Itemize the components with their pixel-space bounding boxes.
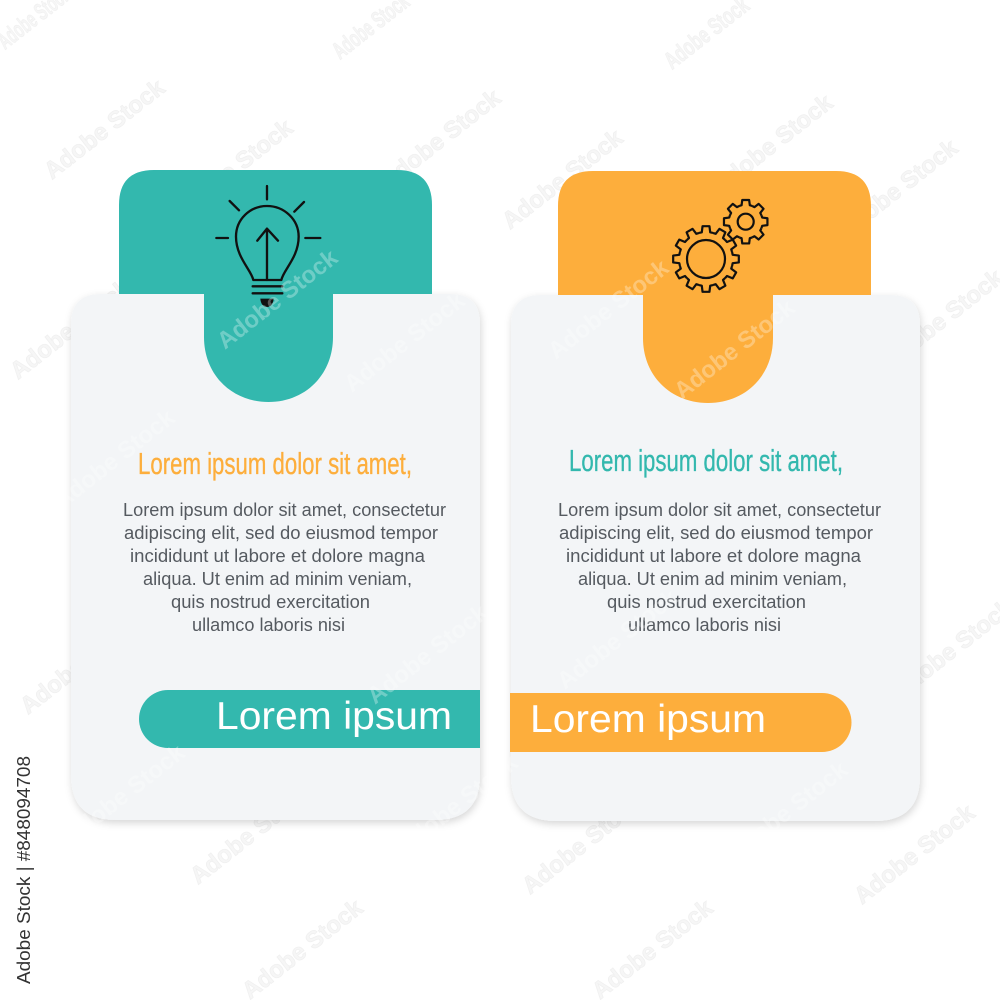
left body text: quis nostrud exercitation (171, 592, 370, 612)
text: Adobe Stock (517, 789, 648, 900)
right body text: aliqua. Ut enim ad minim veniam, (578, 569, 847, 589)
right card background (511, 295, 920, 821)
text: Adobe Stock (707, 89, 838, 200)
text: Adobe Stock (15, 609, 146, 720)
right heading: Lorem ipsum dolor sit amet, (569, 443, 843, 478)
text: Adobe Stock (543, 254, 674, 365)
text: Adobe Stock (722, 756, 853, 867)
right body text: quis nostrud exercitation (607, 592, 806, 612)
text: Adobe Stock (49, 404, 180, 515)
left body text: adipiscing elit, sed do eiusmod tempor (124, 523, 438, 543)
text: Adobe Stock (375, 84, 506, 195)
text: Adobe Stock (497, 124, 628, 235)
left heading: Lorem ipsum dolor sit amet, (138, 446, 412, 481)
left card background (71, 294, 480, 820)
text: Adobe Stock (362, 599, 493, 710)
left body text: ullamco laboris nisi (192, 615, 345, 635)
right label pill (510, 693, 852, 752)
icon: light bulb (216, 186, 320, 307)
text: Adobe Stock (185, 779, 316, 890)
text: Adobe Stock (39, 74, 170, 185)
text: Adobe Stock (59, 739, 190, 850)
left body text: Lorem ipsum dolor sit amet, consectetur (123, 500, 446, 520)
text: Adobe Stock (832, 134, 963, 245)
text: Adobe Stock (5, 274, 136, 385)
text: Adobe Stock (167, 114, 298, 225)
panel: left card (71, 170, 480, 820)
text: Adobe Stock (392, 749, 523, 860)
text: Adobe Stock (849, 799, 980, 910)
right label pill: Lorem ipsum (530, 698, 766, 741)
left label pill (139, 690, 480, 748)
right orange header tab (558, 171, 871, 403)
left body text: incididunt ut labore et dolore magna (130, 546, 426, 566)
text: Adobe Stock (669, 294, 800, 405)
right body text: ullamco laboris nisi (628, 615, 781, 635)
text: Adobe Stock (552, 584, 683, 695)
left body text: aliqua. Ut enim ad minim veniam, (143, 569, 412, 589)
panel: right card (510, 171, 920, 821)
large gear (673, 226, 739, 292)
stock id caption: Adobe Stock | #848094708 (13, 756, 34, 984)
small gear (724, 200, 767, 243)
right body text: adipiscing elit, sed do eiusmod tempor (559, 523, 873, 543)
left body text (123, 500, 446, 635)
text: Adobe Stock (212, 244, 343, 355)
text: Adobe Stock (339, 287, 470, 398)
left label pill: Lorem ipsum (216, 695, 452, 738)
right body text: Lorem ipsum dolor sit amet, consectetur (558, 500, 881, 520)
icon: gears (673, 200, 767, 292)
right body text (558, 500, 881, 635)
right body text: incididunt ut labore et dolore magna (566, 546, 862, 566)
left teal header tab (119, 170, 432, 402)
